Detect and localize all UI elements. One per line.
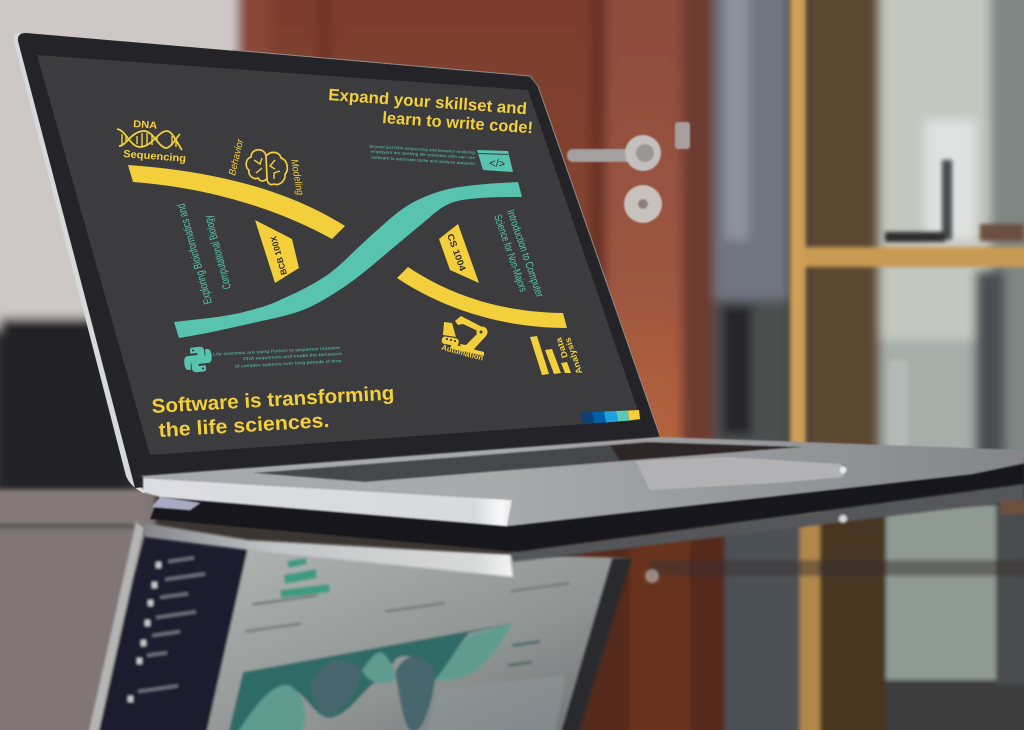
label: BCB 100X: BCB 100X — [268, 235, 289, 276]
course title: Exploring Bioinformatics — [176, 202, 234, 305]
background: blurred room — [0, 0, 1024, 493]
lid bezel — [18, 33, 660, 488]
text block: bottom paragraph: Life scientists are using Python to sequence massive — [213, 345, 341, 357]
table reflection background — [0, 488, 1024, 730]
icon: bar chart, data analysis: Analysis — [562, 336, 584, 376]
icon: DNA sequencing: Sequencing — [123, 148, 187, 165]
course title: Exploring Bioinformatics: Computational Biology — [203, 214, 234, 290]
icon: robot arm, automation: Automation — [440, 343, 484, 363]
icon: bar chart, data analysis: Data — [553, 336, 570, 359]
base underside shadow — [150, 464, 1024, 552]
icon: code window: </> — [489, 158, 505, 170]
icon: DNA sequencing: DNA — [133, 119, 157, 132]
icon: code window — [477, 150, 513, 172]
title: top: learn to write code! — [382, 109, 534, 137]
front silver strip — [143, 478, 512, 526]
icon: brain — [246, 150, 287, 185]
course title: Introduction to Computer Science: Science for Non-Majors — [491, 213, 529, 294]
label: CS 1004: CS 1004 — [445, 232, 468, 272]
track: yellow upper — [128, 165, 345, 239]
lavender glint under front edge — [152, 497, 200, 510]
course title: Exploring Bioinformatics: Exploring Bioinformatics and — [176, 202, 215, 305]
touchpad — [636, 457, 846, 490]
text block: bottom paragraph: DNA sequences and model the behaviors — [243, 351, 342, 361]
laptop base — [141, 437, 1024, 552]
label: CS 1004 — [439, 224, 479, 283]
reflected dashboard — [206, 548, 632, 730]
icon: python logo — [183, 346, 213, 373]
infographic on screen — [117, 86, 640, 442]
label: BCB 100X — [255, 220, 299, 283]
door handle — [567, 122, 690, 223]
text block: top paragraph: Beyond just DNA sequencing and behavior modeling, — [369, 143, 476, 155]
icon: bar chart, data analysis — [530, 336, 584, 376]
text block: bottom paragraph — [213, 345, 343, 369]
text block: bottom paragraph: of complex systems over long periods of time. — [235, 358, 343, 369]
title: bottom — [151, 382, 395, 442]
lid silver edge — [14, 33, 146, 493]
reflected laptop screen — [88, 522, 632, 730]
colour strip — [580, 410, 640, 423]
title: top — [328, 86, 534, 137]
icon: robot arm, automation — [440, 316, 488, 363]
course title: Introduction to Computer Science: Introduction to Computer — [504, 208, 546, 299]
reflected sidebar — [88, 522, 250, 730]
laptop lid — [14, 33, 660, 493]
icon: DNA sequencing — [117, 119, 187, 165]
lid top highlight — [233, 50, 660, 436]
track: yellow lower — [397, 267, 567, 328]
text block: top paragraph: software to automate tasks and analyze datasets. — [371, 155, 476, 166]
text block: top paragraph: employers are seeking life scientists who can use — [370, 149, 476, 160]
track: teal S-curve — [174, 182, 522, 338]
course title: Introduction to Computer Science — [491, 208, 546, 299]
title: bottom: Software is transforming — [151, 382, 395, 418]
label: Modeling: Modeling — [288, 159, 305, 196]
base top surface — [141, 437, 1024, 526]
label: Behavior: Behavior — [227, 138, 246, 177]
text block: top paragraph — [369, 143, 476, 166]
screen — [37, 55, 641, 455]
reflected base — [145, 484, 1024, 583]
reflected area chart — [228, 623, 513, 730]
keyboard — [253, 442, 801, 482]
title: bottom: the life sciences. — [158, 410, 330, 442]
title: top: Expand your skillset and — [328, 86, 527, 118]
